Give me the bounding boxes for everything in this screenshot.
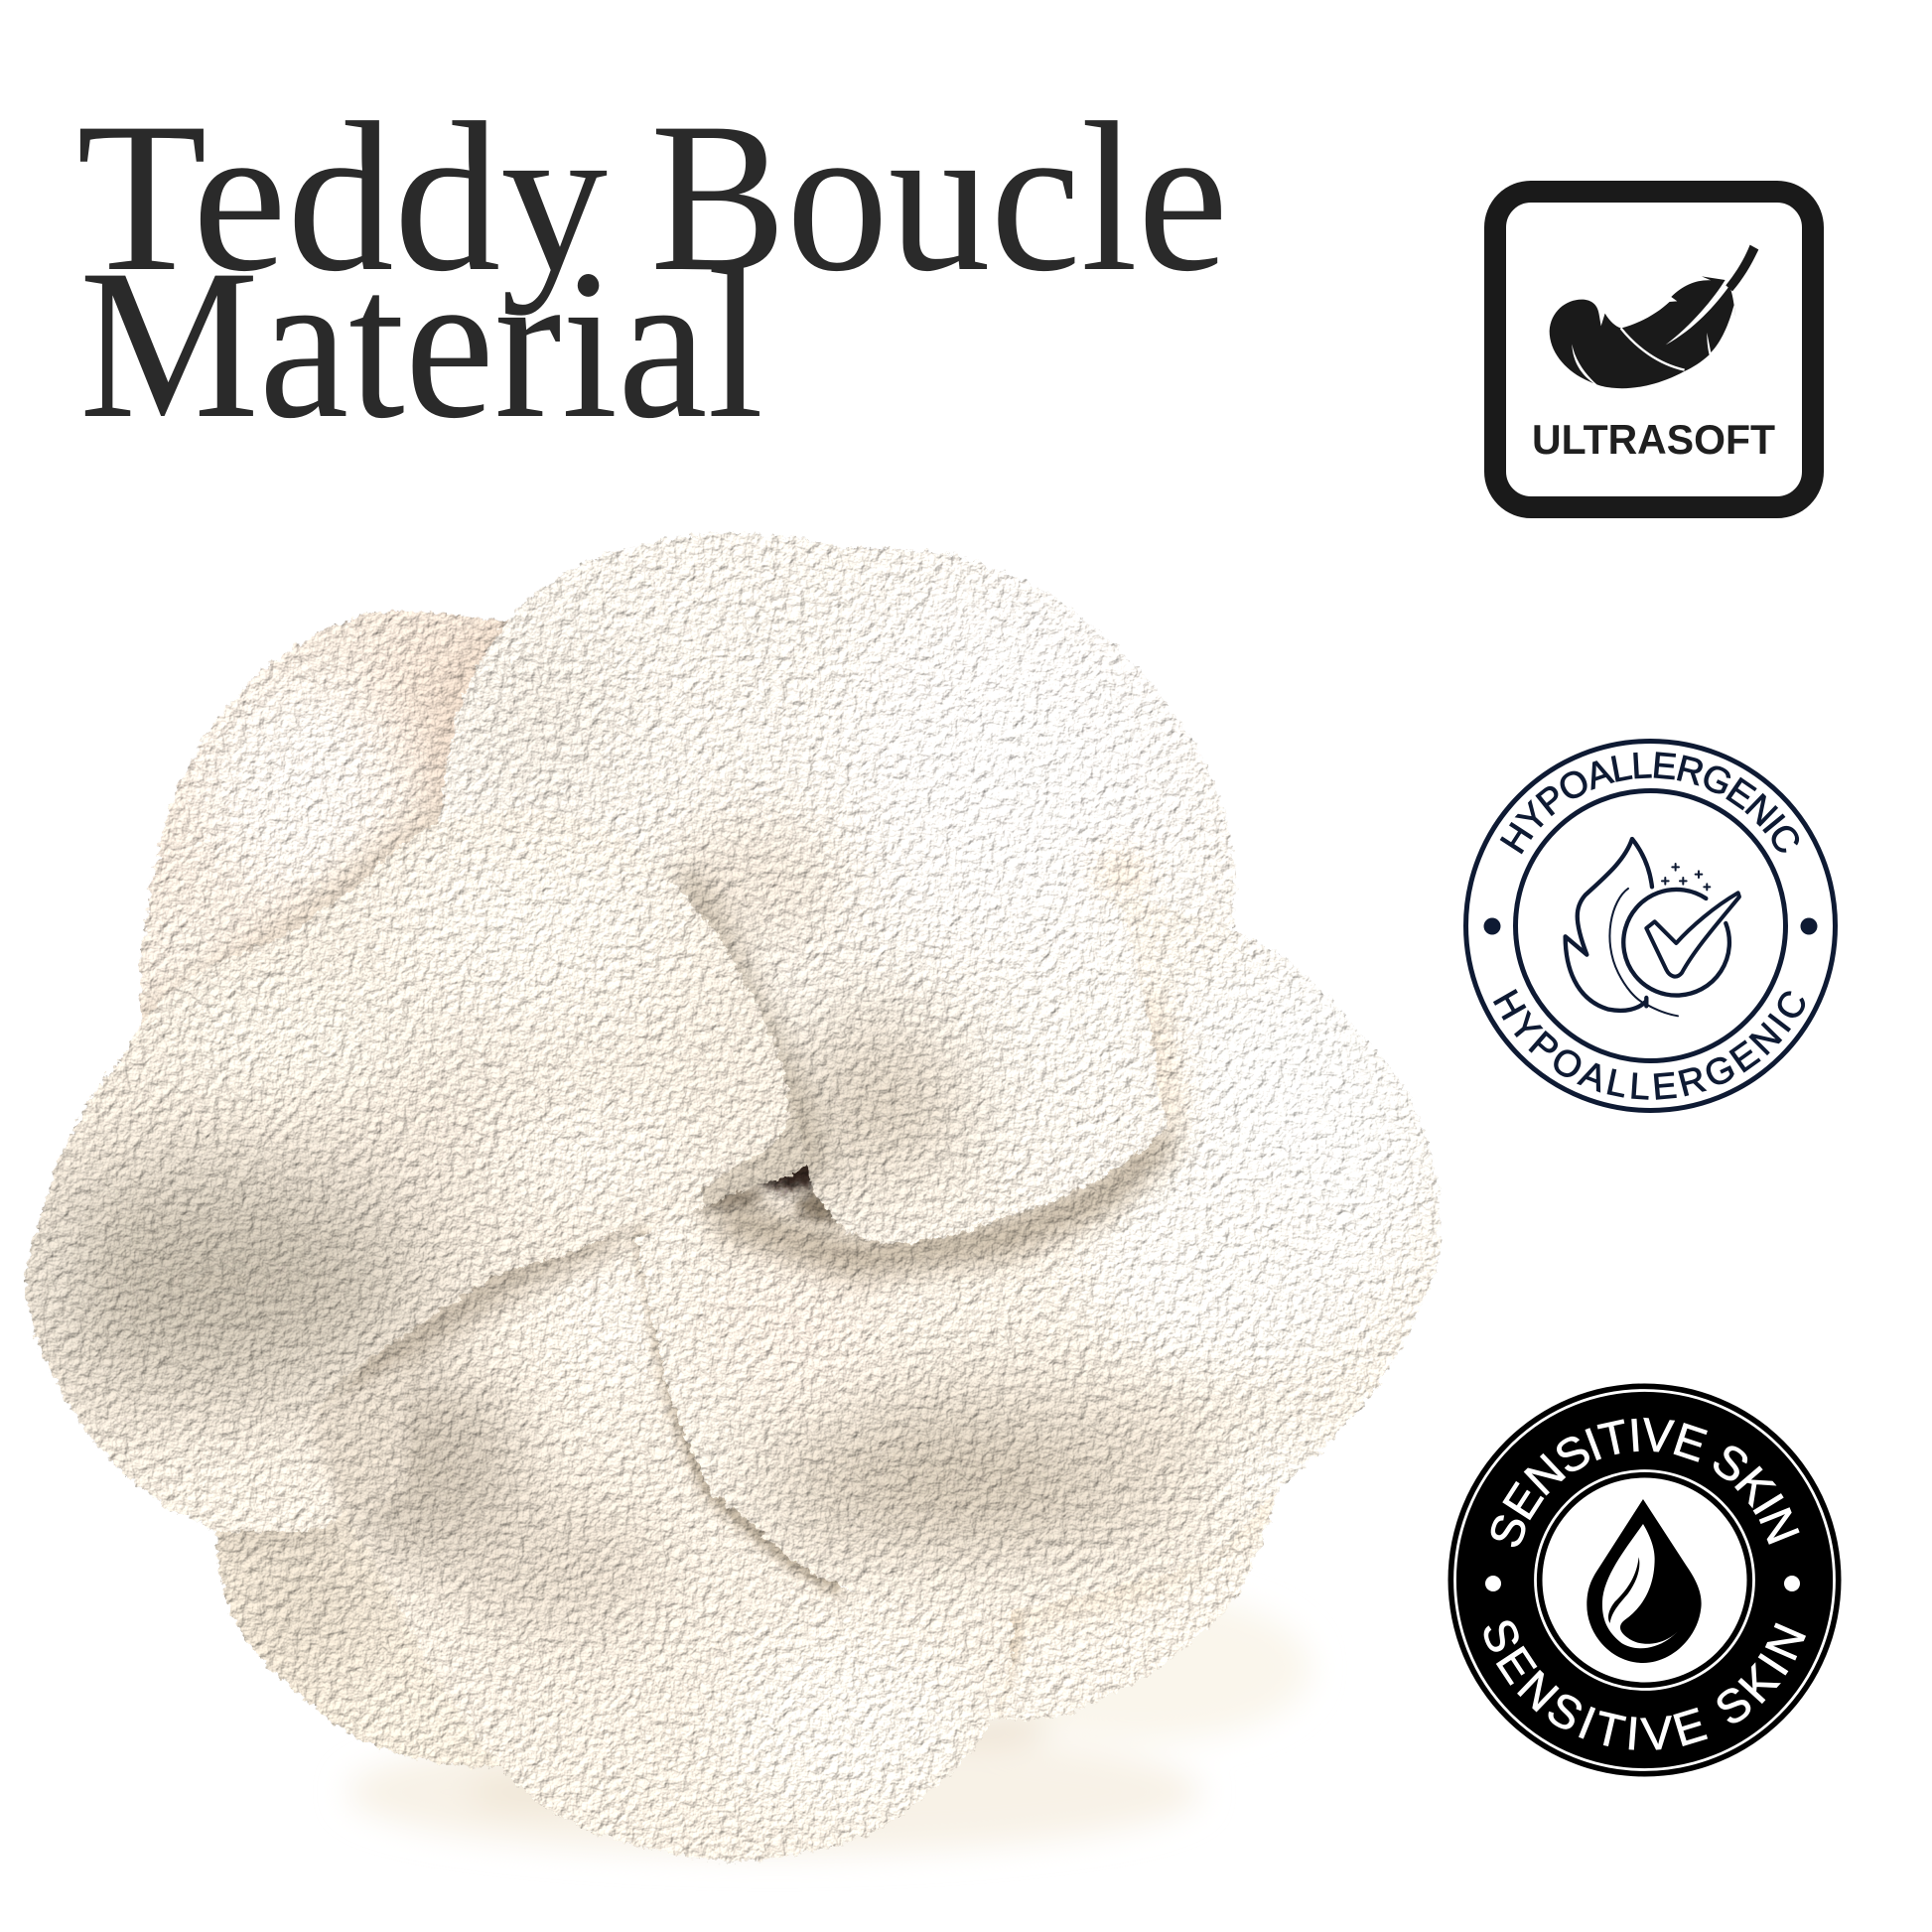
label: ULTRASOFT <box>1532 416 1775 463</box>
top ring text: SENSITIVE SKIN <box>1491 1418 1800 1547</box>
left strand <box>10 804 804 1549</box>
title <box>76 78 1228 463</box>
ground shadow <box>347 1593 1311 1854</box>
badge dots <box>1485 1576 1800 1591</box>
icon: feather <box>1550 245 1758 388</box>
inner thin ring <box>1535 1471 1753 1690</box>
badge: ultrasoft <box>1495 192 1813 507</box>
bottom ring text: HYPOALLERGENIC <box>1493 989 1805 1100</box>
back-left lobe <box>138 610 510 1027</box>
top strand <box>427 516 1251 1261</box>
badge: sensitive skin <box>1448 1384 1841 1777</box>
badge disc <box>1448 1384 1841 1777</box>
bottom ring text: SENSITIVE SKIN <box>1483 1620 1806 1750</box>
top ring text: HYPOALLERGENIC <box>1499 752 1799 854</box>
right strand <box>625 884 1449 1618</box>
badge frame <box>1495 192 1813 507</box>
center underlay <box>199 794 1191 1588</box>
bottom-left back lobe <box>214 1506 501 1770</box>
badge dots <box>1483 917 1817 935</box>
title: Teddy <box>76 78 608 316</box>
front-bottom strand <box>345 1191 1015 1864</box>
badge rings <box>1465 741 1835 1110</box>
title: Boucle <box>650 78 1228 316</box>
icon: leaf and check <box>1566 839 1739 1016</box>
bottom-right back lobe <box>991 1493 1277 1722</box>
inner white disc <box>1543 1477 1747 1682</box>
knot pillow <box>10 516 1449 1876</box>
title: Material <box>79 225 763 463</box>
icon: water drop with leaf <box>1587 1499 1702 1663</box>
badge: hypoallergenic <box>1463 739 1838 1113</box>
outer thin ring <box>1455 1390 1835 1769</box>
front-bottom strand lip <box>315 1362 407 1521</box>
